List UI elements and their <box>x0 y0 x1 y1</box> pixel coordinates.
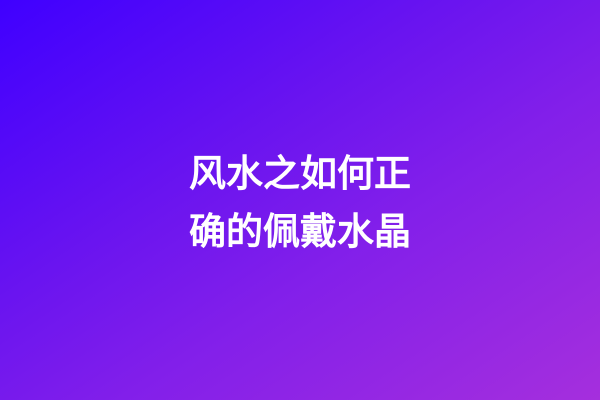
title <box>189 153 411 252</box>
title: 确的佩戴水晶 <box>189 211 411 252</box>
title: 风水之如何正 <box>189 153 411 194</box>
